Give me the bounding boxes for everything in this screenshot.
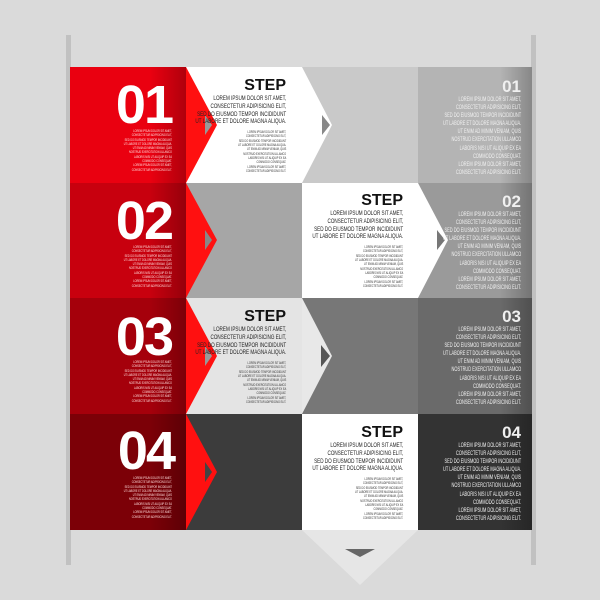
step 1 red tiny text: UT LABORE ET DOLORE MAGNA ALIQUA. xyxy=(124,142,172,146)
step 1 box text: LOREM IPSUM DOLOR SIT AMET, xyxy=(247,165,286,169)
step 2 box text: SED DO EIUSMOD TEMPOR INCIDIDUNT xyxy=(314,226,403,233)
step 4 box text: LOREM IPSUM DOLOR SIT AMET, xyxy=(330,442,403,449)
right panel 02: UT LABORE ET DOLORE MAGNA ALIQUA. xyxy=(443,235,521,242)
step 2 box text: CONSECTETUR ADIPISICING ELIT, xyxy=(363,249,403,253)
right panel 02: SED DO EIUSMOD TEMPOR INCIDIDUNT xyxy=(444,227,521,234)
step 4 red tiny text: LABORIS NISI UT ALIQUIP EX EA xyxy=(134,502,172,506)
step 4 box text: LOREM IPSUM DOLOR SIT AMET, xyxy=(364,477,403,481)
step 4 box text: LOREM IPSUM DOLOR SIT AMET, xyxy=(364,512,403,516)
step 2 box text: UT LABORE ET DOLORE MAGNA ALIQUA. xyxy=(355,258,403,262)
step 4 box text xyxy=(312,424,404,520)
step 1 red tiny text: CONSECTETUR ADIPISICING ELIT, xyxy=(132,133,172,137)
step 1 box text: UT ENIM AD MINIM VENIAM, QUIS xyxy=(247,147,286,151)
step 1 box text: CONSECTETUR ADIPISICING ELIT, xyxy=(246,134,286,138)
step 1 red tiny text: LOREM IPSUM DOLOR SIT AMET, xyxy=(133,129,172,133)
step 2 number: 02 xyxy=(116,191,172,251)
step 3 box text: UT LABORE ET DOLORE MAGNA ALIQUA. xyxy=(195,349,286,356)
step 3 box text: CONSECTETUR ADIPISICING ELIT, xyxy=(246,365,286,369)
step 2 box text: COMMODO CONSEQUAT. xyxy=(373,275,403,279)
step 3 box text: NOSTRUD EXERCITATION ULLAMCO xyxy=(243,383,286,387)
step 1 red tiny text xyxy=(124,129,172,172)
step 4 red tiny text: NOSTRUD EXERCITATION ULLAMCO xyxy=(129,497,172,501)
right panel 01 xyxy=(443,77,522,176)
step 2 box text: LOREM IPSUM DOLOR SIT AMET, xyxy=(364,280,403,284)
step 1 red tiny text: LOREM IPSUM DOLOR SIT AMET, xyxy=(133,163,172,167)
step 1 box text: CONSECTETUR ADIPISICING ELIT. xyxy=(246,169,286,173)
right panel 02: LOREM IPSUM DOLOR SIT AMET, xyxy=(458,276,521,283)
right panel 01: LOREM IPSUM DOLOR SIT AMET, xyxy=(458,96,521,103)
step 2 red tiny text: LABORIS NISI UT ALIQUIP EX EA xyxy=(134,271,172,275)
step 3 box text: CONSECTETUR ADIPISICING ELIT, xyxy=(210,334,286,341)
right panel 03: LABORIS NISI UT ALIQUIP EX EA xyxy=(459,375,521,382)
step 1 box text xyxy=(195,77,286,173)
step 3 box text: LABORIS NISI UT ALIQUIP EX EA xyxy=(248,387,286,391)
right panel 03: UT LABORE ET DOLORE MAGNA ALIQUA. xyxy=(443,350,521,357)
step 3 red tiny text: LOREM IPSUM DOLOR SIT AMET, xyxy=(133,394,172,398)
right panel 04: CONSECTETUR ADIPISICING ELIT. xyxy=(456,515,521,522)
step 4 red tiny text: LOREM IPSUM DOLOR SIT AMET, xyxy=(133,476,172,480)
step 1 red tiny text: LABORIS NISI UT ALIQUIP EX EA xyxy=(134,155,172,159)
right panel 01: 01 xyxy=(502,77,521,96)
step 4 box text: CONSECTETUR ADIPISICING ELIT, xyxy=(327,450,403,457)
step 3 box text: STEP xyxy=(244,308,286,325)
step 2 red tiny text: LOREM IPSUM DOLOR SIT AMET, xyxy=(133,279,172,283)
right panel 03: UT ENIM AD MINIM VENIAM, QUIS xyxy=(457,358,521,365)
step 4 box text: SED DO EIUSMOD TEMPOR INCIDIDUNT xyxy=(356,486,403,490)
step 1 box text: SED DO EIUSMOD TEMPOR INCIDIDUNT xyxy=(239,139,286,143)
right panel 02: 02 xyxy=(502,192,521,211)
right panel 01: UT LABORE ET DOLORE MAGNA ALIQUA. xyxy=(443,120,521,127)
step 2 red tiny text: LOREM IPSUM DOLOR SIT AMET, xyxy=(133,245,172,249)
right panel 01: COMMODO CONSEQUAT. xyxy=(473,153,521,160)
step 2 box text: CONSECTETUR ADIPISICING ELIT. xyxy=(363,284,403,288)
step 1 box text: CONSECTETUR ADIPISICING ELIT, xyxy=(210,103,286,110)
step 3 box text: CONSECTETUR ADIPISICING ELIT. xyxy=(246,400,286,404)
right panel 04: SED DO EIUSMOD TEMPOR INCIDIDUNT xyxy=(444,458,521,465)
step 2 red tiny text: CONSECTETUR ADIPISICING ELIT, xyxy=(132,249,172,253)
right panel 03 xyxy=(443,307,522,406)
step 1 red tiny text: UT ENIM AD MINIM VENIAM, QUIS xyxy=(133,146,172,150)
step 4 box text: CONSECTETUR ADIPISICING ELIT, xyxy=(363,481,403,485)
step 1 box text: STEP xyxy=(244,77,286,94)
right panel 02: COMMODO CONSEQUAT. xyxy=(473,268,521,275)
step 4 red tiny text: COMMODO CONSEQUAT. xyxy=(142,506,172,510)
step 1 box text: LOREM IPSUM DOLOR SIT AMET, xyxy=(213,95,286,102)
step 1 box text: UT LABORE ET DOLORE MAGNA ALIQUA. xyxy=(195,118,286,125)
step 4 box text: LABORIS NISI UT ALIQUIP EX EA xyxy=(365,503,403,507)
step 1 box text: COMMODO CONSEQUAT. xyxy=(256,160,286,164)
step 2 red tiny text: NOSTRUD EXERCITATION ULLAMCO xyxy=(129,266,172,270)
step 3 red tiny text: NOSTRUD EXERCITATION ULLAMCO xyxy=(129,381,172,385)
step 4 red tiny text: CONSECTETUR ADIPISICING ELIT. xyxy=(132,515,172,519)
step 4 red tiny text: CONSECTETUR ADIPISICING ELIT, xyxy=(132,480,172,484)
step 2 red tiny text: CONSECTETUR ADIPISICING ELIT. xyxy=(132,284,172,288)
right panel 04 xyxy=(443,423,522,522)
step 3 red tiny text: UT LABORE ET DOLORE MAGNA ALIQUA. xyxy=(124,373,172,377)
step 3 red tiny text: LABORIS NISI UT ALIQUIP EX EA xyxy=(134,386,172,390)
step 3 red tiny text: UT ENIM AD MINIM VENIAM, QUIS xyxy=(133,377,172,381)
step 2 red tiny text: SED DO EIUSMOD TEMPOR INCIDIDUNT xyxy=(125,254,172,258)
step 3 box text: UT ENIM AD MINIM VENIAM, QUIS xyxy=(247,378,286,382)
step 1 box text: UT LABORE ET DOLORE MAGNA ALIQUA. xyxy=(238,143,286,147)
step 1 red tiny text: CONSECTETUR ADIPISICING ELIT. xyxy=(132,168,172,172)
step 4 box text: UT LABORE ET DOLORE MAGNA ALIQUA. xyxy=(312,465,403,472)
step 3 red tiny text: CONSECTETUR ADIPISICING ELIT. xyxy=(132,399,172,403)
step 2 box text: LABORIS NISI UT ALIQUIP EX EA xyxy=(365,271,403,275)
step 4 box text: CONSECTETUR ADIPISICING ELIT. xyxy=(363,516,403,520)
right panel 03: LOREM IPSUM DOLOR SIT AMET, xyxy=(458,326,521,333)
step 2 red tiny text: COMMODO CONSEQUAT. xyxy=(142,275,172,279)
step 2 red tiny text xyxy=(124,245,172,288)
right panel 03: 03 xyxy=(502,307,521,326)
step 2 box text: UT ENIM AD MINIM VENIAM, QUIS xyxy=(364,262,403,266)
right panel 01: NOSTRUD EXERCITATION ULLAMCO xyxy=(451,136,521,143)
right panel 01: CONSECTETUR ADIPISICING ELIT. xyxy=(456,169,521,176)
step 3 red tiny text: COMMODO CONSEQUAT. xyxy=(142,390,172,394)
right panel 04: NOSTRUD EXERCITATION ULLAMCO xyxy=(451,482,521,489)
step 1 red tiny text: SED DO EIUSMOD TEMPOR INCIDIDUNT xyxy=(125,138,172,142)
step 2 box text: SED DO EIUSMOD TEMPOR INCIDIDUNT xyxy=(356,254,403,258)
step 3 box text: LOREM IPSUM DOLOR SIT AMET, xyxy=(213,326,286,333)
step 3 box text: LOREM IPSUM DOLOR SIT AMET, xyxy=(247,361,286,365)
step 2 box text: LOREM IPSUM DOLOR SIT AMET, xyxy=(330,210,403,217)
right panel 04: COMMODO CONSEQUAT. xyxy=(473,499,521,506)
right panel 01: SED DO EIUSMOD TEMPOR INCIDIDUNT xyxy=(444,112,521,119)
right panel 02 xyxy=(443,192,522,291)
step 2 box text: CONSECTETUR ADIPISICING ELIT, xyxy=(327,218,403,225)
right panel 01: LOREM IPSUM DOLOR SIT AMET, xyxy=(458,161,521,168)
step 1 box text: LABORIS NISI UT ALIQUIP EX EA xyxy=(248,156,286,160)
step 2 red tiny text: UT LABORE ET DOLORE MAGNA ALIQUA. xyxy=(124,258,172,262)
step 2 box text xyxy=(312,192,404,288)
step 2 box text: UT LABORE ET DOLORE MAGNA ALIQUA. xyxy=(312,233,403,240)
step 4 red tiny text: UT LABORE ET DOLORE MAGNA ALIQUA. xyxy=(124,489,172,493)
step 4 box text: SED DO EIUSMOD TEMPOR INCIDIDUNT xyxy=(314,458,403,465)
right panel 02: UT ENIM AD MINIM VENIAM, QUIS xyxy=(457,243,521,250)
step 4 number: 04 xyxy=(118,421,174,481)
right panel 01: LABORIS NISI UT ALIQUIP EX EA xyxy=(459,145,521,152)
step 1 red tiny text: COMMODO CONSEQUAT. xyxy=(142,159,172,163)
right panel 02: CONSECTETUR ADIPISICING ELIT. xyxy=(456,284,521,291)
step 4 red tiny text: SED DO EIUSMOD TEMPOR INCIDIDUNT xyxy=(125,485,172,489)
right panel 02: LOREM IPSUM DOLOR SIT AMET, xyxy=(458,211,521,218)
step 3 red tiny text: SED DO EIUSMOD TEMPOR INCIDIDUNT xyxy=(125,369,172,373)
right panel 04: UT LABORE ET DOLORE MAGNA ALIQUA. xyxy=(443,466,521,473)
right panel 03: COMMODO CONSEQUAT. xyxy=(473,383,521,390)
step 3 box text: SED DO EIUSMOD TEMPOR INCIDIDUNT xyxy=(197,342,286,349)
step 3 red tiny text: CONSECTETUR ADIPISICING ELIT, xyxy=(132,364,172,368)
right panel 02: LABORIS NISI UT ALIQUIP EX EA xyxy=(459,260,521,267)
right panel 03: NOSTRUD EXERCITATION ULLAMCO xyxy=(451,366,521,373)
step 4 red tiny text: UT ENIM AD MINIM VENIAM, QUIS xyxy=(133,493,172,497)
step 4 box text: NOSTRUD EXERCITATION ULLAMCO xyxy=(360,499,403,503)
step 3 box text: UT LABORE ET DOLORE MAGNA ALIQUA. xyxy=(238,374,286,378)
step 1 number: 01 xyxy=(116,75,172,135)
step 2 box text: LOREM IPSUM DOLOR SIT AMET, xyxy=(364,245,403,249)
step 1 box text: SED DO EIUSMOD TEMPOR INCIDIDUNT xyxy=(197,111,286,118)
right panel 04: LOREM IPSUM DOLOR SIT AMET, xyxy=(458,442,521,449)
right panel 03: LOREM IPSUM DOLOR SIT AMET, xyxy=(458,391,521,398)
right panel 01: UT ENIM AD MINIM VENIAM, QUIS xyxy=(457,128,521,135)
step 4 red tiny text xyxy=(124,476,172,519)
step 3 box text: SED DO EIUSMOD TEMPOR INCIDIDUNT xyxy=(239,370,286,374)
step 1 box text: LOREM IPSUM DOLOR SIT AMET, xyxy=(247,130,286,134)
right panel 01: CONSECTETUR ADIPISICING ELIT, xyxy=(456,104,521,111)
step 3 box text: COMMODO CONSEQUAT. xyxy=(256,391,286,395)
right panel 04: CONSECTETUR ADIPISICING ELIT, xyxy=(456,450,521,457)
right panel 02: NOSTRUD EXERCITATION ULLAMCO xyxy=(451,251,521,258)
step 4 red tiny text: LOREM IPSUM DOLOR SIT AMET, xyxy=(133,510,172,514)
right panel 03: CONSECTETUR ADIPISICING ELIT. xyxy=(456,399,521,406)
right panel 04: UT ENIM AD MINIM VENIAM, QUIS xyxy=(457,474,521,481)
step 4 box text: STEP xyxy=(361,424,403,441)
step 2 red tiny text: UT ENIM AD MINIM VENIAM, QUIS xyxy=(133,262,172,266)
step 1 box text: NOSTRUD EXERCITATION ULLAMCO xyxy=(243,152,286,156)
right panel 03: SED DO EIUSMOD TEMPOR INCIDIDUNT xyxy=(444,342,521,349)
step 2 box text: STEP xyxy=(361,192,403,209)
step 3 box text xyxy=(195,308,286,404)
step 4 box text: UT ENIM AD MINIM VENIAM, QUIS xyxy=(364,494,403,498)
step 3 box text: LOREM IPSUM DOLOR SIT AMET, xyxy=(247,396,286,400)
step 3 red tiny text: LOREM IPSUM DOLOR SIT AMET, xyxy=(133,360,172,364)
right panel 04: LABORIS NISI UT ALIQUIP EX EA xyxy=(459,491,521,498)
right panel 02: CONSECTETUR ADIPISICING ELIT, xyxy=(456,219,521,226)
step 2 box text: NOSTRUD EXERCITATION ULLAMCO xyxy=(360,267,403,271)
step 4 box text: UT LABORE ET DOLORE MAGNA ALIQUA. xyxy=(355,490,403,494)
step 3 number: 03 xyxy=(116,307,172,367)
step 4 box text: COMMODO CONSEQUAT. xyxy=(373,507,403,511)
right panel 04: 04 xyxy=(502,423,521,442)
right panel 04: LOREM IPSUM DOLOR SIT AMET, xyxy=(458,507,521,514)
right panel 03: CONSECTETUR ADIPISICING ELIT, xyxy=(456,334,521,341)
step 3 red tiny text xyxy=(124,360,172,403)
step 1 red tiny text: NOSTRUD EXERCITATION ULLAMCO xyxy=(129,150,172,154)
